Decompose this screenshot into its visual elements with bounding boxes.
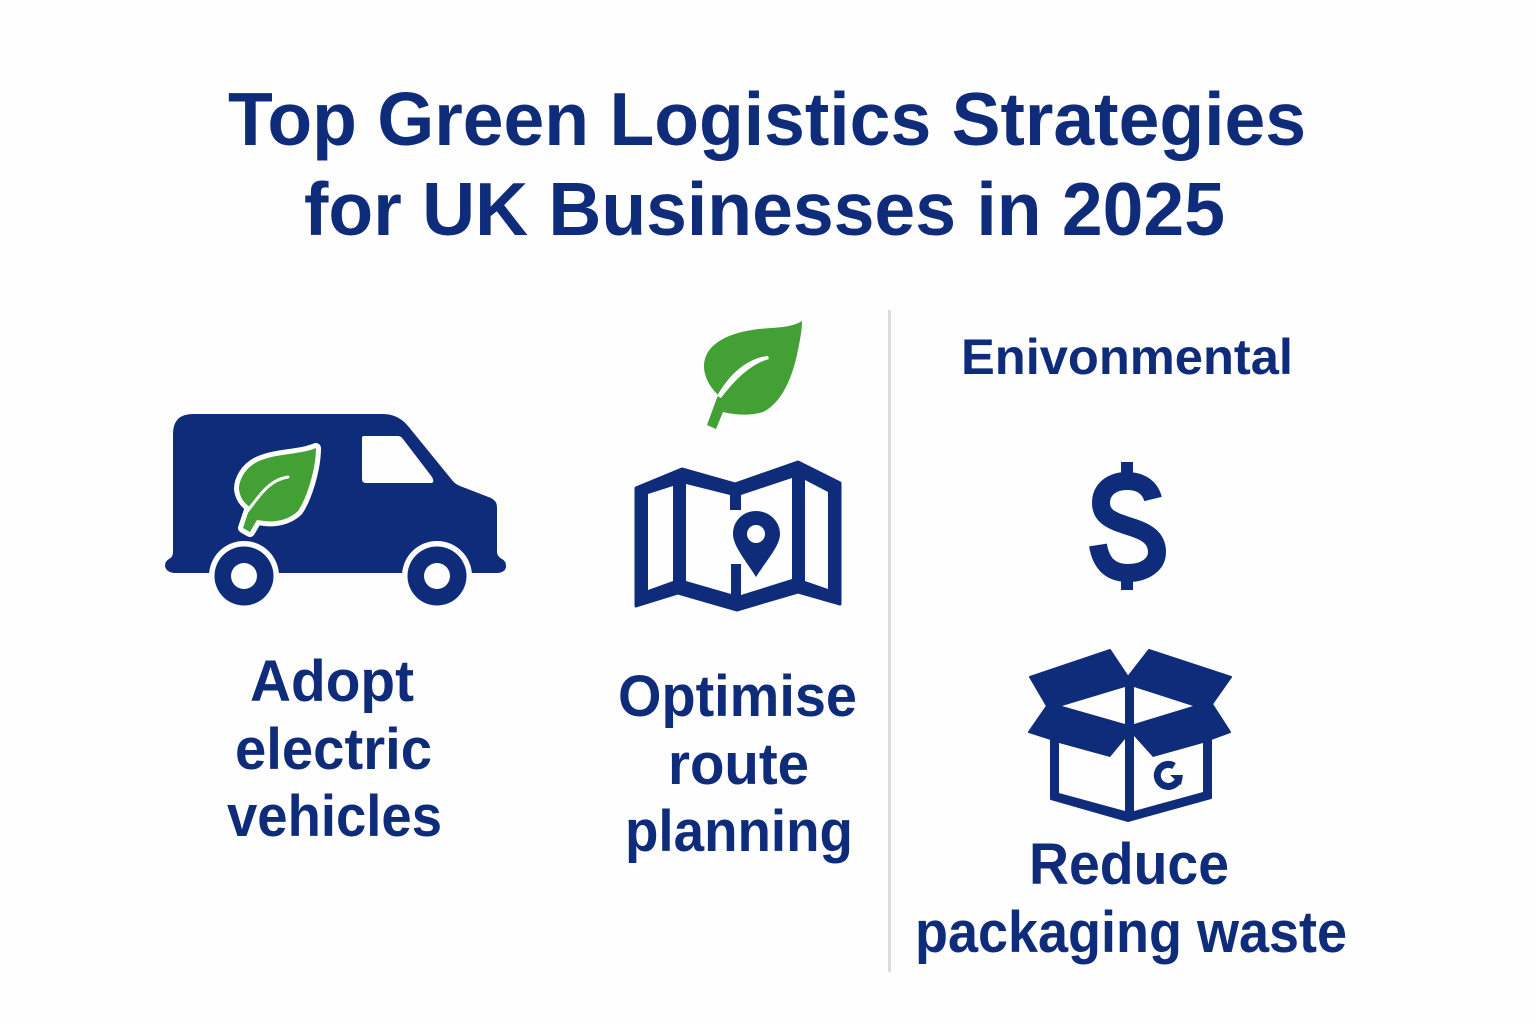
panel: optimise route planning xyxy=(618,321,857,864)
label: optimise route planning: route xyxy=(668,732,809,797)
icon: open recycling box xyxy=(1029,650,1231,821)
icon: folded map with pin xyxy=(636,462,840,610)
title: Top Green Logistics Strategies xyxy=(228,77,1306,161)
label: reduce packaging waste xyxy=(915,832,1347,965)
title: for UK Businesses in 2025 xyxy=(304,167,1225,251)
icon: electric van xyxy=(165,414,506,611)
label: adopt electric vehicles xyxy=(227,649,442,849)
label: optimise route planning xyxy=(618,664,857,864)
icon: leaf on van xyxy=(239,448,316,532)
label: adopt electric vehicles: Adopt xyxy=(250,649,414,714)
label: optimise route planning: planning xyxy=(625,799,853,864)
panel: adopt electric vehicles xyxy=(165,414,506,849)
label: adopt electric vehicles: electric xyxy=(235,717,432,782)
panel: environmental xyxy=(915,329,1347,965)
label: optimise route planning: Optimise xyxy=(618,664,857,729)
label: reduce packaging waste: Reduce xyxy=(1029,832,1229,897)
title xyxy=(228,77,1306,251)
label: adopt electric vehicles: vehicles xyxy=(227,784,442,849)
heading: environmental: Enivonmental xyxy=(961,329,1293,385)
icon: green leaf xyxy=(704,321,802,429)
label: reduce packaging waste: packaging waste xyxy=(915,900,1347,965)
icon: dollar sign xyxy=(1098,462,1157,590)
